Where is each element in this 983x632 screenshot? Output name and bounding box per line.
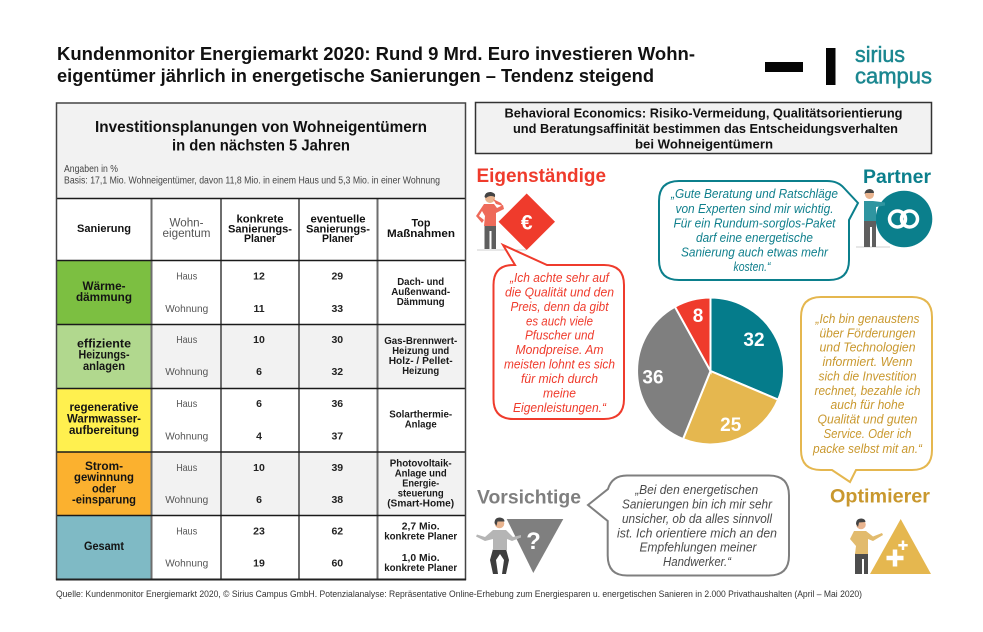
- title: eigentümer jährlich in energetische Sanierungen – Tendenz steigend: [57, 66, 654, 86]
- row: regenerative Warmwasseraufbereitung: 36: [331, 398, 343, 410]
- callout: Partner quote: Für ein Rundum-sorglos-Paket: [674, 216, 836, 230]
- callout: Optimierer quote: rechnet, bezahle ich: [814, 384, 921, 398]
- column headers: Maßnahmen: [387, 228, 455, 240]
- row: Gesamt: konkrete Planer: [384, 530, 457, 542]
- panel: Behavioral Economics heading: bei Wohneigentümern: [635, 136, 773, 152]
- callout: Vorsichtige quote: unsicher, ob da alles sinnvoll: [622, 512, 773, 526]
- icon: Vorsichtige person with question triangle: [476, 518, 563, 574]
- row: Gesamt: Gesamt: [84, 541, 124, 553]
- row: Gesamt: 19: [253, 558, 265, 570]
- row: Gesamt: 23: [253, 526, 265, 538]
- table header panel: Angaben in %: [64, 164, 118, 175]
- callout: Partner quote: von Experten sind mir wichtig.: [676, 202, 834, 216]
- icon: Eigenständige person with euro diamond: [476, 192, 555, 250]
- heading: Eigenständige: Eigenständige: [476, 166, 606, 187]
- pie chart: [637, 298, 784, 444]
- row: effiziente Heizungsanlagen: 6: [256, 366, 262, 378]
- callout: Eigenständige quote: Preis, denn da gibt: [510, 300, 609, 314]
- row fills: [56, 260, 466, 580]
- callout: Eigenständige quote: es auch viele: [526, 314, 593, 328]
- row: effiziente Heizungsanlagen: Heizungs-: [78, 350, 130, 362]
- row: Stromgewinnung oder -einsparung: Strom-: [85, 461, 123, 473]
- column headers: Sanierungs-: [306, 224, 370, 236]
- callout: Vorsichtige quote: Sanierungen bin ich mir sehr: [622, 498, 773, 512]
- row: effiziente Heizungsanlagen: effiziente: [77, 338, 131, 350]
- logo: sirius campus: sirius: [855, 42, 905, 67]
- callout: Vorsichtige quote: Empfehlungen meiner: [640, 540, 757, 554]
- heading: Optimierer: Optimierer: [830, 486, 931, 508]
- callout: Optimierer quote: informiert. Wenn: [822, 355, 913, 369]
- callout: Eigenständige quote: „Ich achte sehr auf: [509, 271, 610, 285]
- heading: Vorsichtige: Vorsichtige: [477, 488, 581, 508]
- callout: Optimierer quote: Service. Oder ich: [824, 427, 912, 441]
- column headers: Sanierungs-: [228, 224, 292, 236]
- callout: Optimierer quote: über Förderungen: [820, 326, 916, 340]
- row: Stromgewinnung oder -einsparung: [72, 458, 454, 510]
- row: Gesamt: 2,7 Mio.: [402, 520, 440, 532]
- row: Stromgewinnung oder -einsparung: Wohnung: [165, 494, 208, 506]
- callout: Eigenständige quote: Pfuscher und: [525, 329, 595, 343]
- callout: Eigenständige quote: meine: [543, 386, 576, 400]
- logo: sirius campus: campus: [855, 64, 932, 88]
- panel: investment table: [56, 103, 466, 580]
- callout: Eigenständige quote: meisten lohnt es sich: [504, 358, 615, 372]
- row: Wärmedämmung: Dämmung: [397, 296, 445, 308]
- row: Gesamt: 60: [331, 558, 343, 570]
- row: effiziente Heizungsanlagen: Wohnung: [165, 366, 208, 378]
- row: effiziente Heizungsanlagen: anlagen: [83, 361, 125, 373]
- callout: Optimierer quote: „Ich bin genaustens: [815, 312, 920, 326]
- row: Wärmedämmung: Außenwand-: [391, 286, 451, 298]
- row: Wärmedämmung: Wärme-: [82, 281, 126, 293]
- row: Wärmedämmung: [76, 270, 451, 315]
- callout: Vorsichtige quote: „Bei den energetischen: [634, 483, 758, 497]
- icon: Vorsichtige person with question triangle: ?: [526, 528, 541, 555]
- table header panel: in den nächsten 5 Jahren: [172, 138, 350, 154]
- callout: Optimierer quote: und Technologien: [820, 341, 916, 355]
- row: regenerative Warmwasseraufbereitung: Haus: [176, 398, 197, 410]
- title: Kundenmonitor Energiemarkt 2020: Rund 9 Mrd. Euro investieren Wohn-: [57, 44, 695, 64]
- callout: Eigenständige quote: für mich durch: [521, 372, 598, 386]
- row: effiziente Heizungsanlagen: Holz- / Pellet-: [389, 355, 453, 367]
- row: effiziente Heizungsanlagen: 32: [331, 366, 343, 378]
- pie chart: 25: [720, 415, 742, 436]
- row: regenerative Warmwasseraufbereitung: regenerative: [70, 402, 138, 414]
- row: regenerative Warmwasseraufbereitung: [67, 398, 453, 442]
- callout: Optimierer quote: Qualität und guten: [818, 413, 918, 427]
- row: Gesamt: konkrete Planer: [384, 562, 457, 574]
- row: effiziente Heizungsanlagen: 10: [253, 334, 265, 346]
- row: regenerative Warmwasseraufbereitung: Solarthermie-: [389, 408, 453, 420]
- table header panel: Investitionsplanungen von Wohneigentümern: [95, 119, 427, 136]
- callout: Vorsichtige quote: [588, 476, 789, 576]
- row: regenerative Warmwasseraufbereitung: 4: [256, 430, 262, 442]
- row: Gesamt: Wohnung: [165, 558, 208, 570]
- row: Stromgewinnung oder -einsparung: gewinnung: [74, 472, 134, 484]
- row: Gesamt: [84, 520, 457, 574]
- panel: Behavioral Economics heading: Behavioral Economics: Risiko-Vermeidung, Qualitätsorientierung: [504, 106, 903, 120]
- row: regenerative Warmwasseraufbereitung: 6: [256, 398, 262, 410]
- column headers: konkrete: [236, 214, 284, 226]
- row: Stromgewinnung oder -einsparung: Haus: [176, 462, 197, 474]
- callout: Eigenständige quote: die Qualität und den: [505, 285, 614, 299]
- row: effiziente Heizungsanlagen: Gas-Brennwert-: [384, 335, 458, 347]
- callout: Partner quote: „Gute Beratung und Ratschläge: [670, 187, 838, 201]
- column headers: Planer: [322, 233, 355, 245]
- row: Stromgewinnung oder -einsparung: Anlage und: [395, 468, 447, 480]
- callout: Optimierer quote: packe selbst mit an.“: [812, 442, 923, 456]
- row: effiziente Heizungsanlagen: Heizung: [402, 365, 439, 377]
- row: Wärmedämmung: 29: [331, 270, 343, 282]
- pie chart: 8: [693, 306, 703, 327]
- row: Wärmedämmung: Dach- und: [397, 276, 444, 288]
- icon: Eigenständige person with euro diamond: €: [521, 212, 533, 234]
- pie chart: 36: [642, 368, 664, 388]
- panel: Behavioral Economics heading: [476, 102, 932, 154]
- table header panel: Basis: 17,1 Mio. Wohneigentümer, davon 11,8 Mio. in einem Haus und 5,3 Mio. in einer Wohnung: [64, 176, 440, 186]
- table header panel: [56, 103, 466, 198]
- heading: Partner: Partner: [863, 167, 932, 188]
- row: effiziente Heizungsanlagen: [77, 334, 458, 378]
- column headers: Wohn-: [170, 218, 204, 230]
- callout: Partner quote: Sanierung auch etwas mehr: [681, 246, 829, 260]
- callout: Optimierer quote: sich die Investition: [818, 370, 917, 384]
- row: regenerative Warmwasseraufbereitung: aufbereitung: [69, 425, 139, 437]
- row: Wärmedämmung: dämmung: [76, 292, 132, 304]
- callout: Partner quote: kosten.“: [734, 260, 771, 274]
- row: Stromgewinnung oder -einsparung: 6: [256, 494, 262, 506]
- row: effiziente Heizungsanlagen: Haus: [176, 334, 197, 346]
- callout: Optimierer quote: [801, 297, 932, 482]
- column headers: eigentum: [162, 228, 210, 240]
- row: Stromgewinnung oder -einsparung: oder: [92, 484, 117, 496]
- row: regenerative Warmwasseraufbereitung: 37: [331, 430, 343, 442]
- row: Stromgewinnung oder -einsparung: -einsparung: [72, 494, 136, 506]
- row: regenerative Warmwasseraufbereitung: Wohnung: [165, 430, 208, 442]
- callout: Vorsichtige quote: Handwerker.“: [663, 555, 732, 569]
- callout: Eigenständige quote: Mondpreise. Am: [516, 343, 604, 357]
- table grid: [56, 103, 466, 580]
- column headers: Top: [412, 218, 431, 230]
- callout: Eigenständige quote: Eigenleistungen.“: [513, 401, 607, 415]
- row: Wärmedämmung: 12: [253, 270, 265, 282]
- icon: Optimierer person with plus triangle: [850, 518, 931, 574]
- row: Stromgewinnung oder -einsparung: Energie-: [402, 478, 440, 490]
- callout: Vorsichtige quote: ist. Ich orientiere mich an den: [617, 526, 777, 540]
- source footnote: Quelle: Kundenmonitor Energiemarkt 2020, © Sirius Campus GmbH. Potenzialanalyse: Repräsentative Online-Erhebung zum Energiesparen u. energetischen Sanieren in 2.000 Privathaushalten (April – Mai 2020): [56, 589, 862, 599]
- row: Stromgewinnung oder -einsparung: Photovoltaik-: [390, 458, 452, 470]
- column headers: Sanierung: [77, 223, 131, 235]
- row: Wärmedämmung: 11: [253, 303, 265, 315]
- callout: Partner quote: darf eine energetische: [696, 231, 813, 245]
- row: Stromgewinnung oder -einsparung: steuerung: [398, 488, 444, 500]
- icon: Partner person with rings circle: [856, 189, 932, 247]
- logo: sirius campus: [765, 42, 932, 88]
- title: [57, 44, 695, 86]
- callout: Optimierer quote: auch für hohe: [830, 398, 905, 412]
- row: effiziente Heizungsanlagen: 30: [331, 334, 343, 346]
- row: Gesamt: 62: [331, 526, 343, 538]
- row: Wärmedämmung: Haus: [176, 270, 197, 282]
- row: Stromgewinnung oder -einsparung: 38: [331, 494, 343, 506]
- row: regenerative Warmwasseraufbereitung: Anlage: [405, 418, 437, 430]
- row: Stromgewinnung oder -einsparung: 39: [331, 462, 343, 474]
- column headers: [77, 214, 455, 245]
- row: Gesamt: Haus: [176, 526, 197, 538]
- column headers: eventuelle: [310, 214, 366, 226]
- row: regenerative Warmwasseraufbereitung: Warmwasser-: [67, 414, 141, 426]
- pie chart: 32: [743, 330, 765, 351]
- row: Stromgewinnung oder -einsparung: (Smart-Home): [387, 498, 454, 510]
- callout: Partner quote: [659, 181, 858, 280]
- column headers: Planer: [244, 233, 277, 245]
- row: Wärmedämmung: Wohnung: [165, 303, 208, 315]
- callout: Eigenständige quote: [494, 245, 624, 419]
- row: Wärmedämmung: 33: [331, 303, 343, 315]
- row: effiziente Heizungsanlagen: Heizung und: [392, 345, 449, 357]
- row: Stromgewinnung oder -einsparung: 10: [253, 462, 265, 474]
- row: Gesamt: 1,0 Mio.: [402, 552, 440, 564]
- panel: Behavioral Economics heading: und Beratungsaffinität bestimmen das Entscheidungsverhalten: [513, 121, 898, 136]
